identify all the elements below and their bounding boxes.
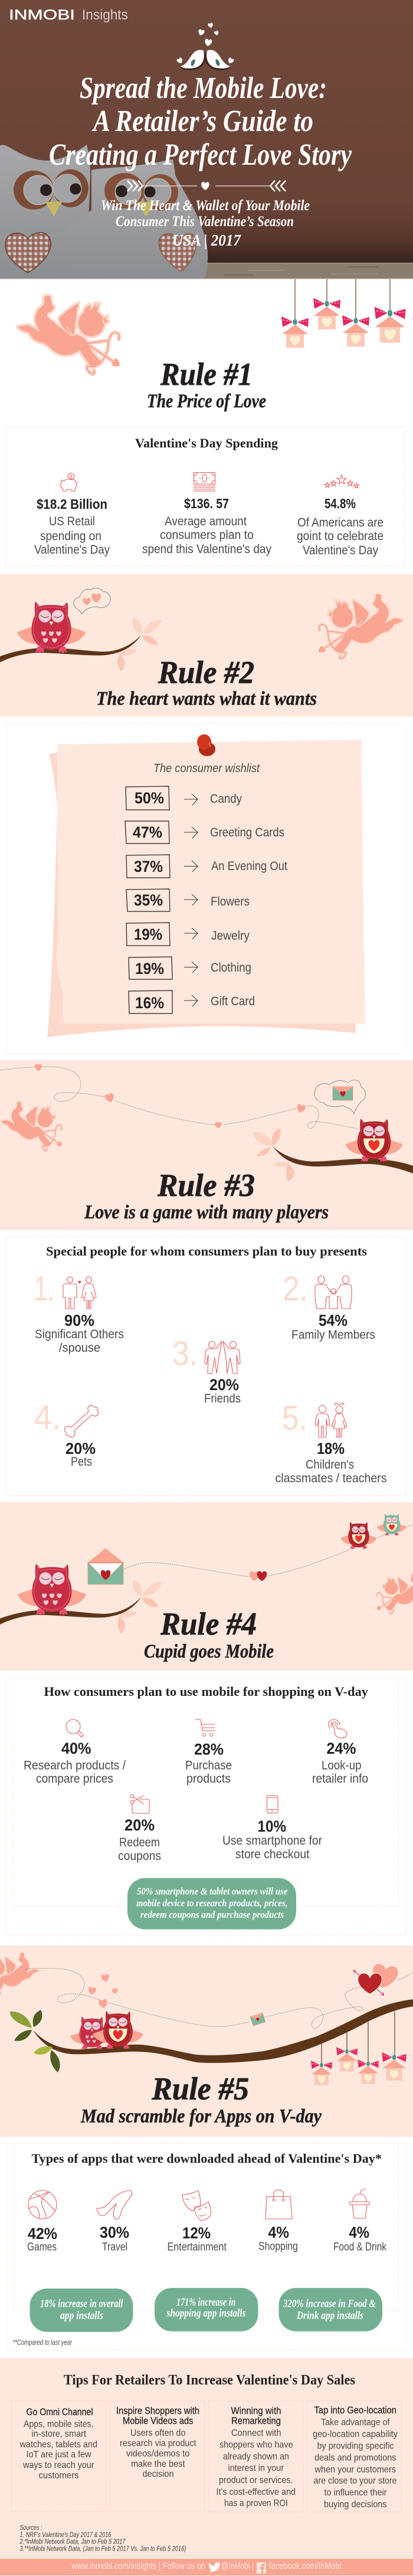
panel heading: Special people for whom consumers plan to buy presents: [46, 1244, 367, 1258]
stat: redeem coupons: [118, 1794, 161, 1863]
stat: redeem coupons: 20%: [124, 1816, 155, 1834]
heading: rule 5: Rule #5: [152, 2071, 249, 2106]
illustration: cupid top left: [18, 296, 122, 374]
footnote: **Compared to last year: [13, 2338, 72, 2347]
stat: average amount: consumers plan to: [160, 528, 254, 542]
item 5: classmates and teachers: [275, 1399, 387, 1485]
stat: store checkout: [222, 1796, 322, 1861]
section background: tips: [0, 2358, 413, 2576]
stat: food and drink: Food & Drink: [333, 2241, 386, 2254]
item 1: significant others: [34, 1270, 124, 1355]
section background: rule 4: [0, 1502, 413, 1671]
tip: remarketing: already shown an: [223, 2452, 289, 2461]
list item: greeting cards: 47%: [133, 823, 162, 841]
stat: research: compare prices: [36, 1772, 113, 1786]
item 3: friends: Friends: [204, 1392, 241, 1405]
stat: entertainment: [168, 2191, 227, 2254]
hanging houses: [311, 2011, 407, 2085]
subtitle: [101, 198, 310, 249]
front owl pillow: [64, 159, 208, 279]
heading: rule 4: Cupid goes Mobile: [144, 1641, 274, 1662]
item 2: family members: Family Members: [291, 1328, 375, 1342]
icon: bone: [62, 1403, 101, 1440]
item 3: friends: [172, 1335, 241, 1405]
icon: scissors: [130, 1794, 149, 1813]
icon: red pin: [197, 734, 215, 756]
tip: remarketing: It's cost-effective and: [216, 2487, 296, 2497]
icon: children: [315, 1403, 347, 1437]
branch: [33, 1999, 413, 2063]
list item: flowers: 35%: [134, 891, 163, 909]
heading: rule 3: Love is a game with many players: [84, 1202, 329, 1223]
tip: geo-location: to influence their: [324, 2487, 387, 2498]
list item: an evening out: [126, 855, 287, 878]
panel: consumer wishlist: [7, 724, 406, 1053]
sources: 3.**InMobi Network Data, (Jan to Feb 5 2017 Vs. Jan to Feb 5 2016): [20, 2545, 186, 2552]
tip: omni channel: Apps, mobile sites,: [24, 2419, 93, 2430]
panel: special people: [6, 1237, 406, 1496]
list item: candy: 50%: [135, 789, 164, 807]
icon: friends high five: [205, 1341, 240, 1374]
icon: shopping bag: [266, 2190, 292, 2219]
subtitle: Consumer This Valentine’s Season: [116, 214, 294, 230]
stat: americans celebrating: Valentine's Day: [303, 544, 378, 557]
illustration: cupid left: [1, 1102, 63, 1151]
callout: shopping installs: [155, 2288, 258, 2332]
icon: magnifier: [66, 1719, 84, 1737]
heading: rule 3: Rule #3: [157, 1168, 255, 1203]
panel heading: Types of apps that were downloaded ahead of Valentine's Day*: [32, 2151, 382, 2166]
stat: us retail spending: US Retail: [49, 515, 95, 528]
icon: twitter: [209, 2562, 221, 2572]
tip: mobile video ads: research via product: [120, 2438, 196, 2448]
list item: greeting cards: Greeting Cards: [210, 826, 284, 839]
tip: omni channel: IoT are just a few: [26, 2450, 91, 2460]
item 3: friends: 3.: [172, 1335, 198, 1373]
stat: shopping: [258, 2190, 298, 2253]
list item: candy: [126, 786, 242, 810]
tip: geo-location: when your customers: [314, 2465, 396, 2474]
heading: rule 1: [147, 357, 266, 412]
stat: research: [24, 1719, 126, 1786]
stat: redeem coupons: coupons: [118, 1849, 161, 1863]
icon: smartphone: [267, 1796, 278, 1813]
stat: entertainment: Entertainment: [168, 2241, 227, 2254]
callout: food installs: Drink app installs: [296, 2309, 363, 2322]
footer bar: [0, 2559, 413, 2575]
callout: shopping installs: shopping app installs: [166, 2307, 245, 2320]
tip: mobile video ads: Users often do: [130, 2428, 186, 2438]
icon: piggy bank: $: [70, 474, 73, 479]
subtitle: USA | 2017: [172, 231, 241, 249]
item 2: family members: 54%: [319, 1312, 348, 1329]
tip: mobile video ads: Inspire Shoppers with: [116, 2405, 199, 2417]
stat: us retail spending: spending on: [40, 529, 101, 543]
heading: rule 4: [144, 1606, 274, 1662]
icon: high heel: [97, 2191, 132, 2219]
tip: omni channel: customers: [39, 2471, 79, 2480]
item 5: classmates and teachers: classmates / teachers: [275, 1472, 387, 1485]
heading: rule 3: [84, 1168, 329, 1223]
tip: remarketing: [209, 2401, 303, 2512]
list item: gift card: [129, 990, 255, 1014]
stat: americans celebrating: 54.8%: [324, 496, 356, 511]
stat: average amount: $136. 57: [184, 496, 229, 511]
panel: valentine's day spending: [6, 427, 405, 567]
stat: purchase: products: [186, 1772, 231, 1786]
tip: geo-location: deals and promotions: [314, 2453, 396, 2463]
item 2: family members: 2.: [283, 1270, 308, 1308]
list item: greeting cards: [125, 821, 284, 844]
sources: Sources :: [20, 2525, 42, 2532]
stat: purchase: 28%: [194, 1740, 224, 1758]
panel heading: Valentine's Day Spending: [135, 436, 278, 450]
heading: rule 5: [80, 2071, 322, 2127]
illustration: hanging houses: [281, 279, 405, 348]
item 1: significant others: 1.: [34, 1270, 54, 1308]
item 4: pets: Pets: [71, 1455, 92, 1469]
stat: americans celebrating: goint to celebrate: [297, 529, 384, 543]
item 1: significant others: 90%: [64, 1312, 94, 1329]
icon: facebook: [257, 2562, 266, 2574]
stat: store checkout: store checkout: [235, 1848, 310, 1861]
icon: hearts with arrow: [353, 1963, 399, 1996]
list item: jewelry: 19%: [134, 926, 162, 943]
callout: overall installs: app installs: [60, 2309, 103, 2322]
tip: geo-location: buying decisions: [324, 2499, 387, 2510]
stat: games: 42%: [28, 2225, 57, 2242]
stat: purchase: [185, 1719, 232, 1786]
callout: 50% owners: 50% smartphone & tablet owners will use: [137, 1885, 288, 1897]
tip: mobile video ads: make the best: [131, 2459, 185, 2469]
stat: shopping: Shopping: [258, 2241, 298, 2253]
tip: mobile video ads: videos/demos to: [126, 2448, 190, 2459]
stat: research: 40%: [61, 1740, 91, 1757]
tip: mobile video ads: Mobile Videos ads: [123, 2415, 194, 2426]
footer bar: www.inmobi.com/insights | Follow us on: [71, 2561, 205, 2571]
illustration: dotted flight with hearts and small owls: [124, 1513, 413, 1581]
sources: 1. NRF's Valentine's Day 2017 & 2016: [20, 2532, 112, 2539]
list item: clothing: 19%: [135, 960, 164, 978]
logo: INMOBI: [9, 7, 75, 23]
callout: food installs: [278, 2288, 382, 2332]
list item: jewelry: [126, 923, 250, 946]
icon: couple: [63, 1277, 96, 1309]
heading: rule 2: [96, 655, 317, 710]
icon: piggy bank: [60, 473, 78, 491]
icon: envelope: [88, 1548, 123, 1584]
illustration: cupid right clipped: [376, 1574, 413, 1614]
callout: shopping installs: 171% increase in: [176, 2296, 236, 2309]
tip: remarketing: Connect with: [231, 2428, 281, 2438]
section background: rule 5: [0, 1946, 413, 2137]
title: [49, 71, 352, 172]
list item: clothing: [129, 957, 251, 979]
icon: theatre masks: [182, 2191, 211, 2221]
icon: cart: [195, 1719, 215, 1737]
icon: small envelope: [250, 2013, 266, 2026]
illustration: owl on branch with thought bubble: [0, 588, 162, 671]
footer bar: facebook.com/InMobi: [269, 2561, 341, 2571]
list item: flowers: [126, 889, 250, 911]
stat: average amount: spend this Valentine's day: [142, 542, 271, 556]
list heading: The consumer wishlist: [153, 762, 260, 775]
callout: overall installs: [30, 2289, 133, 2332]
stat: purchase: Purchase: [185, 1759, 232, 1772]
item 4: pets: [34, 1398, 101, 1469]
tip: geo-location: Tap into Geo-location: [314, 2405, 396, 2415]
illustration: rule 5 branch scene: [0, 1953, 413, 2085]
stat: store checkout: Use smartphone for: [222, 1834, 322, 1848]
stat: store checkout: 10%: [257, 1817, 286, 1835]
list item: an evening out: 37%: [134, 858, 163, 875]
stat: entertainment: 12%: [182, 2224, 211, 2242]
item 5: classmates and teachers: 18%: [317, 1440, 345, 1457]
tip: remarketing: shoppers who have: [219, 2440, 293, 2450]
stat: travel: Travel: [102, 2241, 127, 2254]
illustration: owl with envelope bubble: [253, 1080, 413, 1182]
illustration: owl, branch and envelope: [0, 1548, 162, 1633]
stat: research: Research products /: [24, 1759, 126, 1772]
icon: stars: [325, 475, 359, 488]
list item: clothing: Clothing: [211, 961, 251, 975]
tip: geo-location: [307, 2401, 401, 2512]
sticky note paper: [47, 740, 365, 1037]
icon: love birds with hearts: [176, 22, 234, 70]
stat: us retail spending: Valentine's Day: [34, 543, 110, 557]
item 5: classmates and teachers: 5.: [282, 1399, 307, 1437]
heading: rule 2: The heart wants what it wants: [96, 688, 317, 710]
section background: rule 2: [0, 574, 413, 717]
icon: family: [315, 1276, 352, 1309]
stat: americans celebrating: [297, 496, 384, 557]
tip: geo-location: Take advantage of: [321, 2418, 390, 2427]
icon: drink cup: [350, 2189, 369, 2218]
panel: mobile shopping use: [6, 1679, 406, 1936]
stat: food and drink: 4%: [349, 2224, 369, 2241]
list item: candy: Candy: [210, 792, 242, 806]
title: Spread the Mobile Love:: [80, 71, 327, 105]
list item: gift card: Gift Card: [211, 995, 255, 1008]
stat: shopping: 4%: [268, 2224, 289, 2241]
tip: geo-location: geo-location capability: [313, 2430, 398, 2439]
tip: omni channel: Go Omni Channel: [26, 2406, 93, 2418]
tip: remarketing: product or services.: [219, 2476, 293, 2485]
stat: look-up: retailer info: [312, 1772, 368, 1786]
stat: look-up: Look-up: [322, 1759, 361, 1772]
icon: cash: [194, 472, 215, 491]
tip: geo-location: are close to your store: [314, 2476, 397, 2486]
heading: rule 4: Rule #4: [160, 1606, 257, 1642]
tip: remarketing: Remarketing: [231, 2415, 281, 2426]
heading: rule 1: The Price of Love: [147, 391, 266, 412]
callout: overall installs: 18% increase in overall: [40, 2297, 123, 2310]
owls couple: [70, 2016, 114, 2049]
stat: americans celebrating: Of Americans are: [297, 516, 384, 529]
logo: Insights: [82, 7, 128, 23]
illustration: cupid right: [317, 594, 403, 659]
tip: mobile video ads: decision: [143, 2469, 173, 2479]
tip: omni channel: ways to reach your: [22, 2460, 94, 2470]
tip: remarketing: has a proven ROI: [224, 2498, 288, 2509]
stat: redeem coupons: Redeem: [119, 1836, 160, 1849]
hero banner: [0, 0, 413, 280]
item 2: family members: [283, 1270, 375, 1342]
tip: remarketing: Winning with: [231, 2405, 281, 2417]
left owl pillow: [0, 145, 90, 279]
divider with heart: [127, 181, 286, 191]
panel heading: How consumers plan to use mobile for shopping on V-day: [44, 1684, 368, 1699]
stat: games: Games: [27, 2241, 57, 2254]
sources: [19, 2525, 186, 2552]
logo: [9, 7, 128, 23]
stat: games: [27, 2191, 57, 2254]
heading: tips: Tips For Retailers To Increase Valentine's Day Sales: [64, 2373, 355, 2388]
list item: gift card: 16%: [135, 994, 164, 1012]
stat: us retail spending: [34, 496, 110, 557]
title: A Retailer’s Guide to: [91, 104, 313, 138]
callout: food installs: 320% increase in Food &: [283, 2297, 376, 2310]
leaves: [9, 2010, 60, 2072]
tip: remarketing: interest in your: [228, 2463, 284, 2473]
icon: basketball: [28, 2191, 57, 2219]
stat: food and drink: [333, 2189, 386, 2254]
heading: rule 5: Mad scramble for Apps on V-day: [80, 2106, 322, 2127]
stat: average amount: [142, 496, 271, 556]
stat: look-up: [312, 1719, 368, 1786]
stat: travel: 30%: [100, 2224, 129, 2241]
tip: mobile video ads: [110, 2401, 204, 2512]
tip: omni channel: [12, 2401, 106, 2511]
panel: app types: [7, 2143, 406, 2351]
list item: an evening out: An Evening Out: [211, 859, 287, 873]
item 5: classmates and teachers: Children's: [306, 1458, 354, 1472]
callout: 50% owners: [127, 1878, 296, 1929]
heading: rule 1: Rule #1: [160, 357, 253, 392]
stat: look-up: 24%: [327, 1740, 356, 1757]
item 3: friends: 20%: [209, 1376, 239, 1394]
illustration: flight path with hearts: [0, 1064, 357, 1129]
callout: 50% owners: redeem coupons and purchase products: [140, 1909, 284, 1920]
stat: us retail spending: $18.2 Billion: [37, 496, 107, 512]
item 1: significant others: Significant Others: [35, 1328, 124, 1341]
stat: travel: [97, 2191, 132, 2254]
item 4: pets: 4.: [34, 1398, 61, 1437]
section background: rule 3: [0, 1060, 413, 1230]
stat: average amount: Average amount: [165, 515, 247, 528]
item 1: significant others: /spouse: [59, 1341, 100, 1355]
heading: rule 2: Rule #2: [158, 655, 254, 690]
subtitle: Win The Heart & Wallet of Your Mobile: [101, 198, 310, 214]
list item: flowers: Flowers: [211, 895, 250, 908]
icon: tap hand: [329, 1719, 347, 1738]
callout: 50% owners: mobile device to research products, prices,: [136, 1897, 288, 1909]
tip: omni channel: watches, tablets and: [19, 2440, 97, 2450]
tip: omni channel: in-store, smart: [32, 2429, 86, 2439]
sources: 2.*InMobi Network Data, Jan to Feb 5 2017: [19, 2538, 126, 2545]
footer bar: @InMobi |: [221, 2561, 254, 2571]
item 4: pets: 20%: [65, 1440, 96, 1457]
tip: geo-location: by providing specific: [317, 2441, 394, 2451]
list item: jewelry: Jewelry: [211, 929, 250, 943]
title: Creating a Perfect Love Story: [49, 138, 352, 172]
